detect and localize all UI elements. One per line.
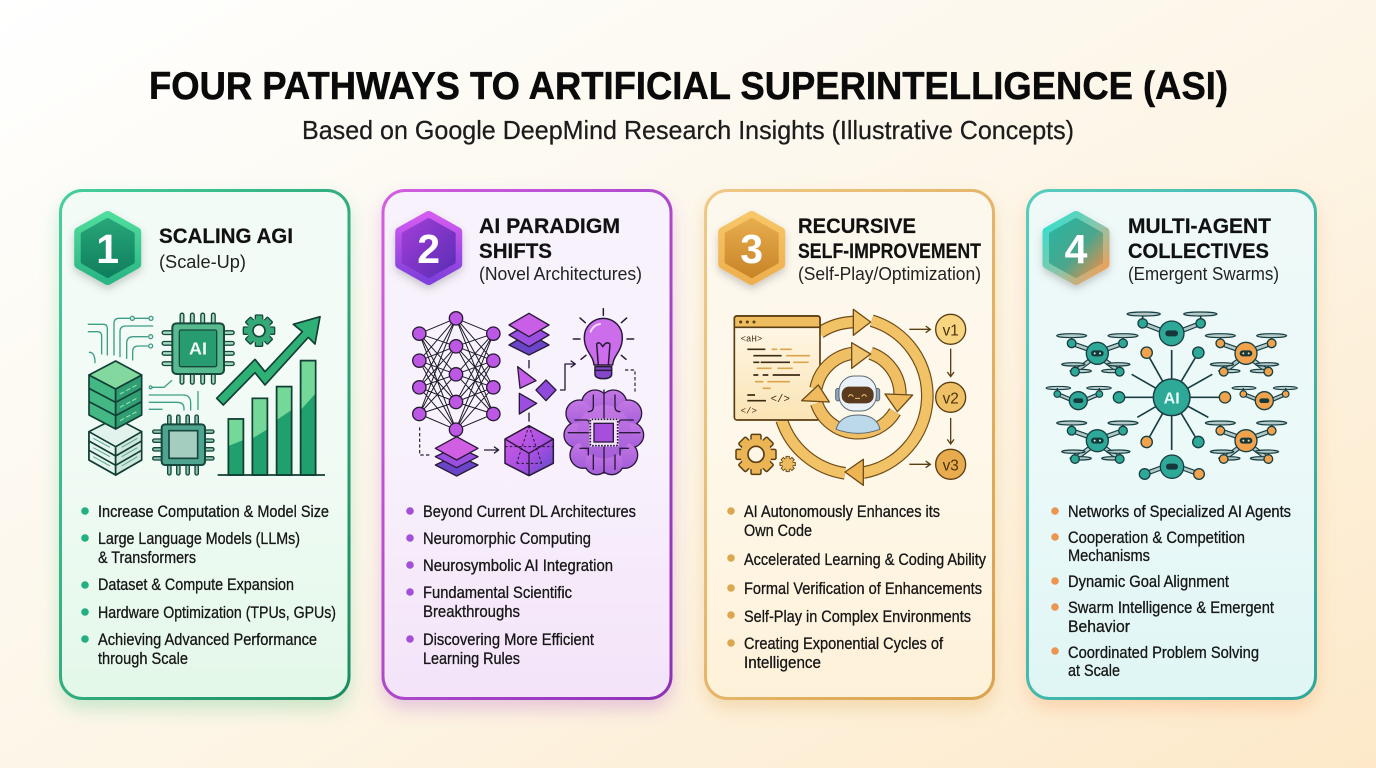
drones: orange	[1205, 334, 1287, 463]
bullet list: Mechanisms	[1068, 546, 1150, 565]
bullet list: & Transformers	[98, 548, 196, 567]
bullet list: Achieving Advanced Performance	[98, 630, 317, 649]
chip	[154, 417, 212, 473]
icon: hexagon number 1: 1	[96, 226, 119, 272]
version nodes v1 to v3: v2	[943, 390, 959, 407]
drones: teal	[1057, 334, 1138, 463]
drone: left small	[1046, 386, 1111, 410]
bullet list	[1051, 502, 1291, 680]
bar chart	[218, 361, 325, 475]
icon: hexagon number 2	[400, 216, 457, 280]
code window: </>	[741, 406, 757, 416]
bullet list: Formal Verification of Enhancements	[744, 579, 982, 598]
layer stack top	[509, 313, 549, 355]
icon: hexagon number 2: 2	[417, 226, 440, 272]
bullet list	[81, 502, 336, 668]
shapes and connectors	[518, 360, 575, 422]
bullet list: Own Code	[744, 521, 812, 540]
neural network	[413, 312, 500, 436]
bullet list: Intelligence	[744, 653, 821, 672]
bullet list: Neuromorphic Computing	[423, 529, 591, 548]
bullet list	[727, 502, 987, 672]
heading: RECURSIVE	[798, 214, 916, 238]
AI hub: AI	[1164, 390, 1180, 407]
bullet list: Fundamental Scientific	[423, 583, 572, 602]
bullet list: Creating Exponential Cycles of	[744, 634, 943, 653]
title: FOUR PATHWAYS TO ARTIFICIAL SUPERINTELLIGENCE (ASI)	[149, 65, 1228, 108]
icon: hexagon number 3: 3	[740, 226, 763, 272]
card background	[383, 190, 671, 698]
bullet list	[406, 502, 636, 668]
server stack: green	[89, 361, 142, 429]
panel: multi-agent collectives	[1028, 190, 1316, 698]
icon: brain with chip	[565, 390, 643, 474]
illustration: drone swarm around AI hub	[1046, 312, 1297, 479]
arrow	[484, 447, 499, 453]
icon: cube	[505, 426, 553, 476]
arrow: growth	[217, 317, 320, 405]
heading: SCALING AGI	[159, 224, 293, 248]
subheading: (Self-Play/Optimization)	[798, 264, 981, 284]
icon: hexagon number 3	[723, 216, 780, 280]
icon: robot	[836, 376, 880, 433]
bullet list: Coordinated Problem Solving	[1068, 643, 1259, 662]
bullet list: Beyond Current DL Architectures	[423, 502, 636, 521]
heading line 2: SELF-IMPROVEMENT	[798, 239, 981, 263]
layer stack bottom	[435, 437, 478, 476]
AI hub	[1153, 379, 1190, 416]
illustration: neural network, layers, bulb and brain	[413, 309, 643, 476]
icon: gear	[243, 315, 275, 346]
bullet list: Behavior	[1068, 617, 1130, 636]
subtitle: Based on Google DeepMind Research Insights (Illustrative Concepts)	[302, 115, 1074, 145]
bullet list: Neurosymbolic AI Integration	[423, 556, 613, 575]
bullet list: Increase Computation & Model Size	[98, 502, 329, 521]
drone: top	[1127, 312, 1217, 346]
icon: hexagon number 4	[1048, 216, 1104, 280]
AI chip: AI	[189, 339, 207, 359]
bullet list: at Scale	[1068, 661, 1120, 680]
panel: AI paradigm shifts	[383, 190, 671, 698]
bullet list: Dynamic Goal Alignment	[1068, 572, 1229, 591]
bullet list: Cooperation & Competition	[1068, 528, 1245, 547]
drone: right small	[1232, 386, 1297, 410]
bullet list: Breakthroughs	[423, 602, 520, 621]
version nodes v1 to v3: v3	[943, 457, 959, 474]
hub spokes	[1119, 350, 1225, 450]
heading line 2: COLLECTIVES	[1128, 239, 1269, 263]
panel: recursive self-improvement	[706, 190, 994, 698]
bullet list: Learning Rules	[423, 649, 520, 668]
bullet list: Self-Play in Complex Environments	[744, 607, 971, 626]
subheading: (Scale-Up)	[159, 252, 246, 272]
bullet list: Dataset & Compute Expansion	[98, 575, 294, 594]
inner cycle arrows	[802, 343, 913, 433]
bullet list: Networks of Specialized AI Agents	[1068, 502, 1291, 521]
AI chip	[164, 315, 232, 382]
code window	[734, 316, 820, 420]
bullet list: Hardware Optimization (TPUs, GPUs)	[98, 603, 336, 622]
version nodes v1 to v3	[909, 314, 966, 479]
circuit traces	[88, 318, 198, 410]
spoke nodes	[1113, 347, 1231, 448]
server stack: white	[89, 418, 142, 475]
card background	[706, 190, 994, 698]
card background	[60, 190, 349, 698]
code window: </>	[771, 394, 790, 406]
heading: AI PARADIGM	[479, 214, 620, 238]
dashed connectors	[420, 370, 635, 455]
illustration: recursive loop	[734, 309, 966, 485]
bullet list: Discovering More Efficient	[423, 630, 594, 649]
version nodes v1 to v3: v1	[943, 322, 959, 339]
bullet list: Large Language Models (LLMs)	[98, 529, 300, 548]
illustration: servers, chips and growth chart	[88, 315, 325, 475]
panel: scaling AGI	[60, 190, 349, 698]
outer cycle arrows	[782, 309, 927, 485]
icon: gears	[736, 434, 795, 474]
card background	[1028, 190, 1316, 698]
bullet list: through Scale	[98, 649, 188, 668]
heading line 2: SHIFTS	[479, 239, 552, 263]
bullet list: Swarm Intelligence & Emergent	[1068, 598, 1274, 617]
bullet list: Accelerated Learning & Coding Ability	[744, 550, 987, 569]
drone: bottom	[1139, 455, 1204, 479]
bullet list: AI Autonomously Enhances its	[744, 502, 940, 521]
icon: hexagon number 1	[79, 216, 136, 280]
code window: <aH>	[741, 335, 762, 345]
icon: light bulb	[573, 309, 634, 379]
icon: hexagon number 4: 4	[1065, 226, 1088, 272]
subheading: (Emergent Swarms)	[1128, 264, 1279, 284]
heading: MULTI-AGENT	[1128, 214, 1271, 238]
subheading: (Novel Architectures)	[479, 264, 642, 284]
